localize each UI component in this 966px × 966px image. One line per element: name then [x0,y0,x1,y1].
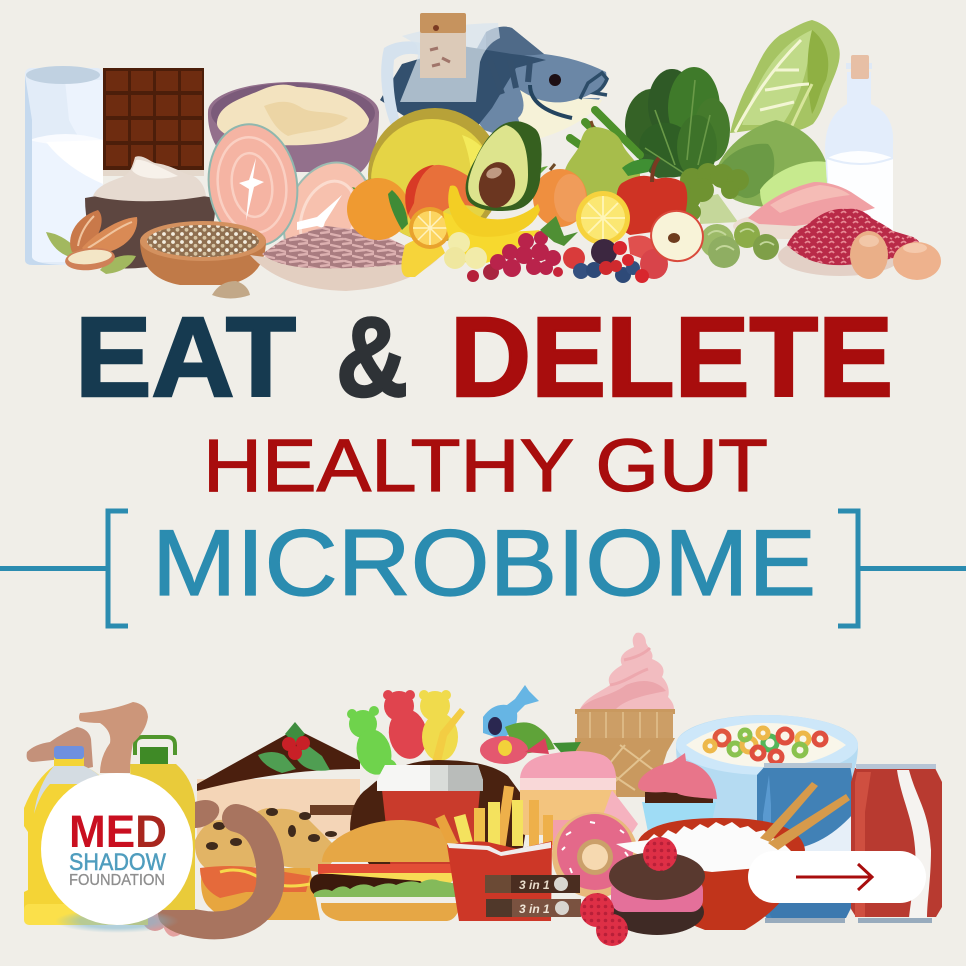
french fries box [435,786,553,921]
peach [530,164,587,227]
chocolate glazed donut [350,760,530,866]
red grapes [467,231,561,282]
chocolate bar [103,68,204,176]
chicken breast and plate [733,182,875,239]
blue soda can [757,763,853,923]
porridge bowl [208,82,379,172]
brown rice plate [250,226,442,291]
ground beef plate [778,209,920,276]
cooking oil jug blue cap [24,746,148,925]
brussels sprouts [700,222,779,268]
bananas [443,186,540,269]
quinoa bowl [140,221,266,298]
layered pink cake [520,751,638,850]
glazed pink donut [552,812,638,898]
orange with leaves [347,178,409,240]
eggs [850,231,941,280]
wrapped candies [480,685,581,764]
pear and beans [564,110,640,201]
ice cream cone [575,633,675,797]
salami slices [141,871,199,939]
coffee sachets [485,875,581,917]
yogurt bowl [85,156,215,269]
green cabbage [716,120,828,214]
main title: eat and delete [75,294,893,420]
unhealthy foods illustration [24,633,942,946]
glass of milk [25,66,103,265]
gummy bears [347,690,465,779]
main title: eat and delete: & [336,294,408,420]
salmon steaks [201,118,387,286]
apple half [644,204,710,268]
chocolate chip cookies [195,808,340,874]
lemon half [576,191,630,245]
subtitle: microbiome: MICROBIOME [152,510,816,615]
romaine lettuce [730,20,840,133]
red apple [616,158,687,235]
coffee sachets: 3 in 1 [519,878,550,892]
spinach [625,67,730,189]
hot dog [200,866,320,920]
chicken legs [27,702,148,773]
broccoli [679,163,749,224]
logo wordmark FOUNDATION: FOUNDATION [69,872,165,889]
almonds and leaves [46,210,137,274]
hamburger [310,820,466,921]
mixed berries [540,216,668,283]
main title: eat and delete: DELETE [450,294,893,420]
cupcake [638,753,717,832]
logo wordmark SHADOW: SHADOW [69,849,166,876]
red soda can [851,764,942,923]
avocado half [466,121,542,211]
bracket left with rule [0,511,128,626]
coffee sachets: 3 in 1 [519,902,550,916]
drink cup [377,765,483,880]
cooking oil jug green cap [130,737,195,910]
main title: eat and delete: EAT [75,294,296,420]
next arrow button [748,851,926,903]
smoked sausage ring [172,795,270,925]
milk bottle [825,55,893,256]
mackerel fish [380,27,607,142]
subtitle: healthy gut: HEALTHY GUT [203,424,768,507]
lemon wedge and banana slices [401,207,451,277]
cereal bowl [676,715,858,855]
bracket right with rule [838,511,966,626]
raspberries [580,837,677,946]
cheesecake slice [197,722,360,839]
chocolate whoopie pie [609,852,705,935]
logo badge [41,773,193,933]
logo wordmark MED: MED [69,806,167,857]
olive oil jar [368,13,502,242]
healthy foods illustration [25,13,941,298]
mango [405,165,490,225]
rice bowl with chopsticks [616,782,850,930]
